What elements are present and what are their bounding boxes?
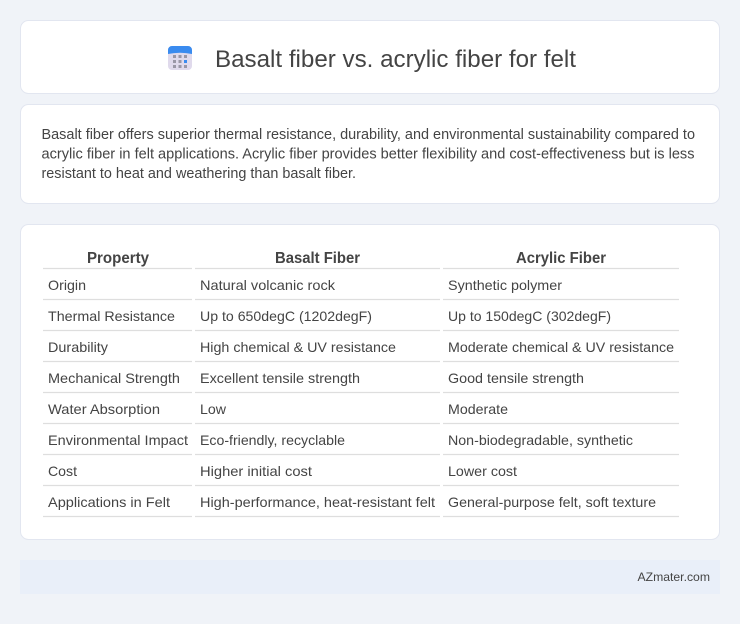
row: cost — [48, 463, 517, 479]
row: environmental impact — [48, 432, 633, 448]
row: thermal resistance: Thermal Resistance — [48, 308, 175, 324]
row: thermal resistance: Up to 650degC (1202degF) — [200, 308, 372, 324]
table header row: Acrylic Fiber — [516, 250, 606, 267]
row: environmental impact: Non-biodegradable, synthetic — [448, 432, 633, 448]
row: durability: High chemical & UV resistance — [200, 339, 396, 355]
row: applications in felt: High-performance, heat-resistant felt — [200, 494, 435, 510]
row: applications in felt: General-purpose felt, soft texture — [448, 494, 656, 510]
text block: summary paragraph: Basalt fiber offers superior thermal resistance, durability, and environmental sustainability compared to — [42, 127, 695, 143]
row: cost: Cost — [48, 463, 77, 479]
row: environmental impact: Eco-friendly, recyclable — [200, 432, 345, 448]
table header row: Basalt Fiber — [275, 250, 360, 267]
row: water absorption: Moderate — [448, 401, 508, 417]
row: origin: Synthetic polymer — [448, 277, 562, 293]
footer brand text: AZmater.com — [638, 570, 710, 584]
row: origin — [48, 277, 562, 293]
row: applications in felt — [48, 494, 656, 510]
row: environmental impact: Environmental Impact — [48, 432, 188, 448]
row: mechanical strength: Excellent tensile strength — [200, 370, 360, 386]
row: water absorption: Water Absorption — [48, 401, 160, 417]
row: cost: Higher initial cost — [200, 463, 312, 479]
row: applications in felt: Applications in Felt — [48, 494, 170, 510]
footer bar — [20, 560, 720, 594]
row: thermal resistance — [48, 308, 611, 324]
table header row — [87, 250, 606, 267]
row: origin: Natural volcanic rock — [200, 277, 336, 293]
row: mechanical strength: Good tensile strength — [448, 370, 584, 386]
row: water absorption: Low — [200, 401, 227, 417]
row: mechanical strength — [48, 370, 584, 386]
row: mechanical strength: Mechanical Strength — [48, 370, 180, 386]
panel: comparison table — [20, 224, 720, 540]
title: Basalt fiber vs. acrylic fiber for felt — [215, 46, 576, 73]
panel: summary — [20, 104, 720, 204]
row: thermal resistance: Up to 150degC (302degF) — [448, 308, 611, 324]
row: durability: Durability — [48, 339, 108, 355]
text block: summary paragraph: resistant to heat and weathering than basalt fiber. — [42, 166, 356, 182]
text block: summary paragraph: acrylic fiber in felt applications. Acrylic fiber provides better flexibility and cost-effectiveness but is less — [42, 146, 694, 162]
row: origin: Origin — [48, 277, 86, 293]
row: durability: Moderate chemical & UV resistance — [448, 339, 674, 355]
icon: calendar — [168, 46, 192, 70]
row: cost: Lower cost — [448, 463, 517, 479]
row: water absorption — [48, 401, 508, 417]
table header row: Property — [87, 250, 149, 267]
panel: title header — [20, 20, 720, 94]
text block: summary paragraph — [42, 127, 695, 182]
row: durability — [48, 339, 674, 355]
